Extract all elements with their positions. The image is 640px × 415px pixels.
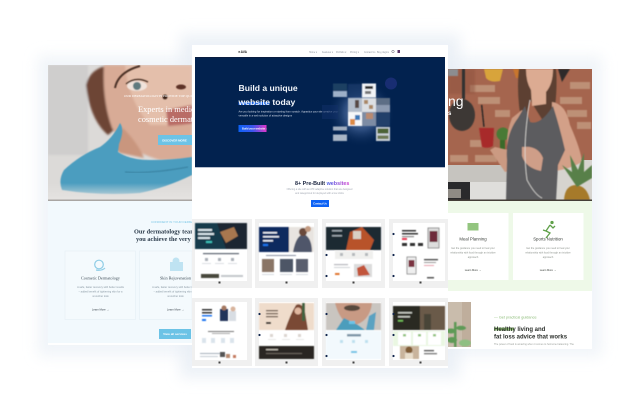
hanging pan, mug and cookware [448,69,570,131]
thumbnail 5 [192,298,252,366]
service card: Meal Planning: Learn More → [465,268,482,272]
hero button: Build your website › [242,127,267,131]
left services section [48,200,204,343]
hero headline: Build a unique [238,83,298,93]
service card: Meal Planning [448,213,508,280]
thumbnail 8 [389,298,448,366]
left services section: you achieve the very best [136,236,204,243]
service card: Sports Nutrition: Learn More → [540,268,557,272]
right lower section text: fat loss advice that works [494,334,568,340]
hero paragraph: Are you looking for inspiration or starting from scratch. Appartics your site creative your [238,110,338,114]
service card: Sports Nutrition [513,213,584,280]
thumbnail 2 [255,219,318,288]
hero button [238,125,267,132]
thumbnail 7 [322,298,385,366]
right green services band [448,200,592,291]
right lower section text: — Get practical guidance [494,316,537,320]
service card: Skin Rejuvenation: Skin Rejuvenation [160,276,192,280]
navigation bar: Buy plugins [377,52,390,54]
services button: View all services [163,332,187,336]
hero tile collage [322,78,397,147]
right lower section text: The power of food is amazing when it comes to hormone balancing. The [494,343,574,346]
panel: right nutrition page [446,69,592,349]
left services section: Our dermatology team [134,228,196,236]
service card: Sports Nutrition: relationship with food through an intuitive [525,252,571,254]
service card: Sports Nutrition: Sports Nutrition [533,236,563,242]
navigation bar: Features ▾ [322,51,333,54]
hero paragraph: versatile in a web solution of attractive designs [238,114,293,118]
left hero text: OUR DERMATOLOGISTS PROVIDE TOP QUALITY [124,94,201,98]
service card: Cosmetic Dermatology: A safe, faster recovery with better results [77,285,125,289]
right hero headline fragment: s [448,111,452,117]
thumbnail 1 [192,219,252,288]
section heading: Offering a site with an ATF adaptive solution that are designed [287,188,353,191]
service card: Meal Planning: Meal Planning [459,236,487,242]
face details [115,66,186,99]
service card: Meal Planning: Get the guidance you need to heal your [451,247,495,250]
section heading: and categorized for deployed with a few clicks [295,192,345,195]
woman [490,69,582,201]
left hero text: cosmetic dermatology [138,115,213,124]
thumbnail 3 [322,219,385,288]
service card: Skin Rejuvenation: – added benefit of tightening skin for a [154,290,198,294]
section button: Contact Us [313,202,327,206]
navigation bar: Portfolio ▾ [336,51,346,54]
navigation bar: Contact Us [364,51,376,54]
panel: left dermatology page [48,65,192,345]
service card: Skin Rejuvenation [140,251,200,320]
left hero button: DISCOVER MORE [162,138,187,142]
hero banner [195,57,445,168]
service card: Skin Rejuvenation: Learn More → [167,307,184,311]
service card: Cosmetic Dermatology: smoother look [92,294,109,298]
service card: Meal Planning: approach [468,256,479,259]
left hero text: Experts in medical [138,105,201,114]
service card: Cosmetic Dermatology [65,251,136,320]
service card: Sports Nutrition: approach [543,256,554,259]
service card: Skin Rejuvenation: A safe, faster recovery with better results [152,285,200,289]
service card: Sports Nutrition: Get the guidance you need to heal your [526,247,570,250]
blue glove [60,123,192,194]
thumbnail 4 [389,219,448,288]
thumbnail 6 [255,298,318,366]
hero banner: website today [238,97,296,107]
navigation bar: ✕AVA [238,50,248,54]
service card: Cosmetic Dermatology: Cosmetic Dermatology [81,276,121,280]
left hero button [158,135,192,145]
kitchen counter [448,165,508,182]
icon: runner [543,222,555,238]
right hero photo [448,69,592,201]
right hero headline fragment [448,98,463,115]
section button [311,200,329,207]
section heading: 8+ Pre-Built websites [295,181,349,187]
service card: Cosmetic Dermatology: Learn More → [92,307,109,311]
background soft shadows [38,34,602,378]
service card: Cosmetic Dermatology: – added benefit of tightening skin for a [79,290,123,294]
hero paragraph [238,110,338,118]
left hero text [124,95,192,122]
left services section: CONFIDENT IN YOUR DERMA [151,220,193,224]
navigation bar [238,50,400,54]
service card: Meal Planning: relationship with food through an intuitive [450,252,496,254]
panel: central showcase page [192,45,448,368]
pineapple [562,153,592,200]
right lower section photo [446,302,471,347]
section heading [287,181,353,195]
navigation bar: Home ▾ [309,51,317,54]
services button [159,329,191,339]
right hero headline fragment: ng [448,93,464,109]
thumbnail grid [192,219,448,366]
left hero photo [48,65,192,200]
drink [479,105,510,150]
right lower section text: Healthy living and [494,327,546,333]
service card: Skin Rejuvenation: smoother look [167,294,184,298]
right lower section text [494,316,574,346]
navigation bar: Pricing ▾ [350,51,359,54]
